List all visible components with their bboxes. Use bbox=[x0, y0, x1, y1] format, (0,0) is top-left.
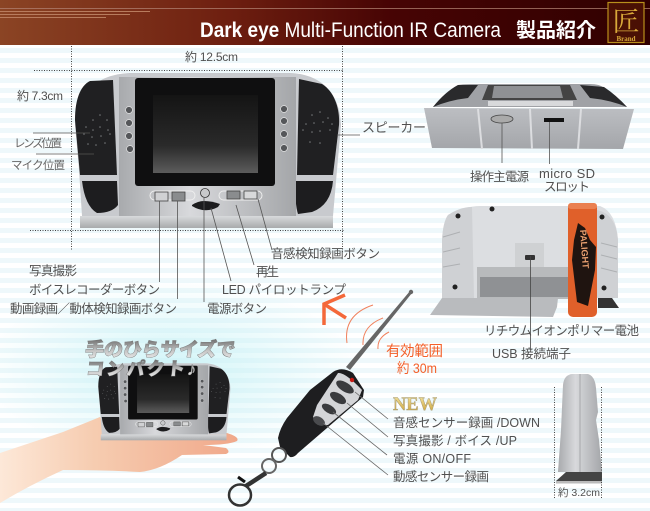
remote label: sound sensor: 音感センサー録画 /DOWN bbox=[393, 415, 540, 430]
side dimension lines bbox=[554, 387, 602, 498]
mic position label: マイク位置 bbox=[11, 159, 66, 172]
dimension lines bbox=[30, 46, 344, 252]
range value: 約 30m bbox=[397, 360, 437, 376]
remote label: motion sensor: 動感センサー録画 bbox=[393, 469, 489, 484]
label: voice recorder: ボイスレコーダーボタン bbox=[29, 282, 160, 297]
label: play: 再生 bbox=[256, 265, 279, 279]
lens position label: レンズ位置 bbox=[14, 136, 62, 150]
brand logo bbox=[608, 0, 644, 43]
remote label: photo voice: 写真撮影 / ボイス /UP bbox=[393, 433, 517, 448]
NEW badge: NEW bbox=[393, 394, 437, 415]
compact slogan: 手のひらサイズで bbox=[84, 338, 236, 361]
speaker label: スピーカー bbox=[362, 120, 426, 135]
mini camera bbox=[98, 363, 230, 440]
title: product introduction: 製品紹介 bbox=[516, 19, 596, 42]
label: photo: 写真撮影 bbox=[29, 263, 77, 278]
remote label: power: 電源 ON/OFF bbox=[393, 452, 471, 466]
compact slogan: コンパクト♪ bbox=[85, 359, 197, 379]
label: sound detection recording: 音感検知録画ボタン bbox=[271, 246, 380, 261]
camera side view bbox=[556, 374, 602, 484]
micro SD slot label: スロット bbox=[544, 180, 590, 194]
range label: 有効範囲 bbox=[386, 342, 443, 360]
hand bbox=[0, 417, 238, 503]
key chain bbox=[229, 448, 286, 506]
signal arrow bbox=[324, 295, 346, 325]
usb callout line bbox=[530, 256, 532, 350]
usb label: USB 接続端子 bbox=[492, 346, 571, 361]
remote body bbox=[278, 369, 364, 457]
brand logo: 匠 bbox=[612, 0, 640, 39]
title: Dark eye Multi-Function IR Camera bbox=[200, 19, 501, 42]
signal waves bbox=[347, 305, 389, 349]
compact slogan bbox=[82, 338, 236, 379]
brand logo: Brand bbox=[616, 35, 636, 43]
label: LED lamp: LED パイロットランプ bbox=[222, 283, 346, 297]
camera back view with battery bbox=[430, 203, 619, 317]
height label: 約 7.3cm bbox=[17, 88, 63, 103]
sd slot callout line bbox=[548, 122, 550, 164]
button labels bbox=[10, 246, 380, 316]
battery: PALIGHT bbox=[578, 229, 591, 269]
battery bbox=[568, 203, 597, 317]
main camera front view bbox=[75, 73, 341, 228]
main power label: 操作主電源 bbox=[470, 169, 529, 184]
micro SD slot label bbox=[539, 166, 595, 194]
width label: 約 12.5cm bbox=[185, 49, 238, 64]
switch callout line bbox=[501, 123, 503, 163]
label: power button: 電源ボタン bbox=[207, 302, 267, 316]
micro SD slot label: micro SD bbox=[539, 166, 595, 181]
battery label: リチウムイオンポリマー電池 bbox=[484, 324, 639, 338]
camera bottom view bbox=[424, 84, 634, 163]
callout lines on front camera bbox=[33, 133, 360, 302]
header banner bbox=[0, 0, 650, 45]
depth label: 約 3.2cm bbox=[558, 486, 600, 499]
antenna bbox=[346, 291, 412, 370]
remote button callouts bbox=[323, 392, 388, 475]
label: video and motion recording: 動画録画／動体検知録画ボタン bbox=[10, 302, 177, 316]
hand holding mini camera bbox=[0, 338, 238, 503]
remote control bbox=[229, 290, 413, 506]
